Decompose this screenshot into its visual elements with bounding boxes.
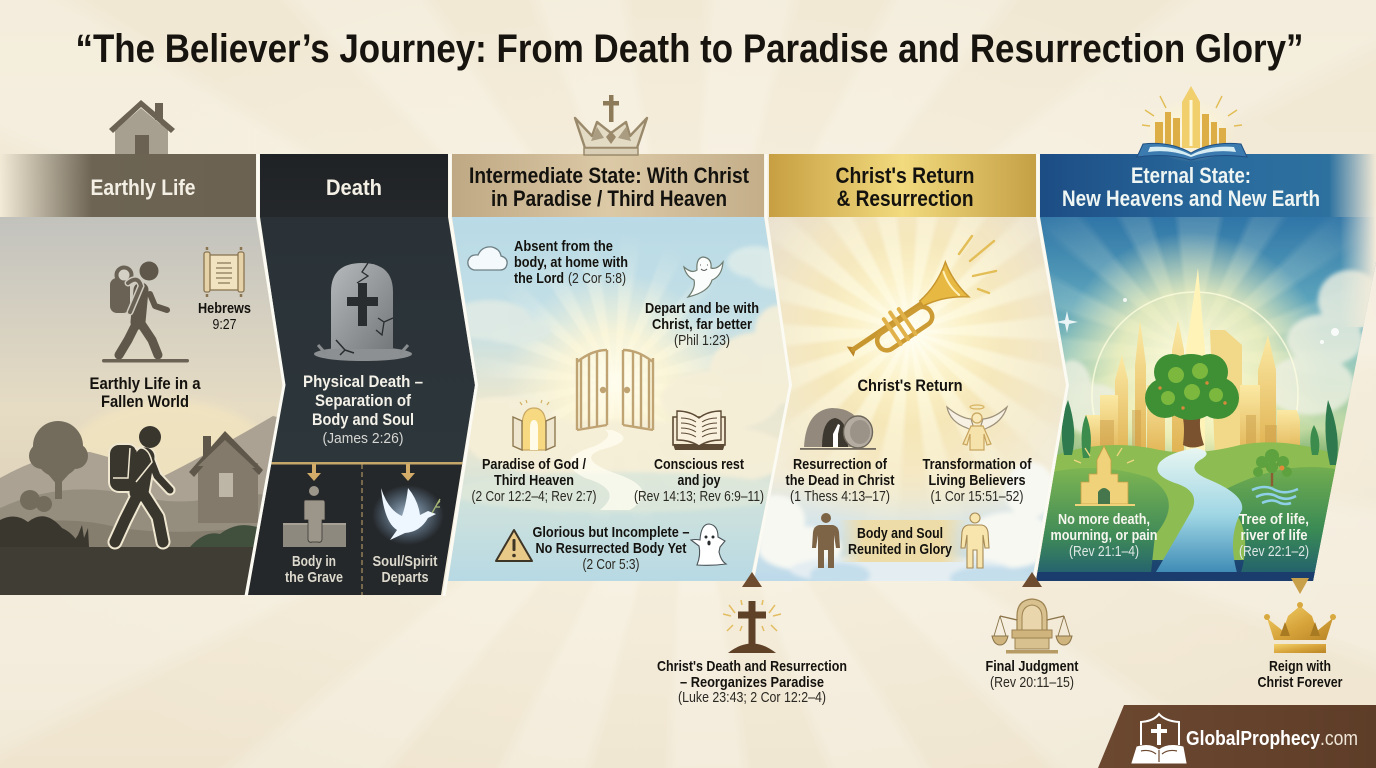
icon: glorified person	[961, 513, 989, 568]
header: death	[260, 154, 448, 217]
text: depart and be with christ: Christ, far better	[652, 316, 752, 333]
icon: house silhouette	[189, 431, 263, 523]
label: (Luke 23:43; 2 Cor 12:2–4)	[678, 690, 826, 706]
label: body in the grave: the Grave	[285, 569, 343, 586]
icon: paradise gate	[513, 400, 555, 454]
tree of life	[1145, 354, 1239, 448]
arrows down	[307, 464, 415, 481]
sparkles	[1056, 298, 1339, 344]
label: physical death: Separation of	[315, 392, 411, 410]
icon: book with golden city	[1137, 86, 1247, 162]
timeline event: reign with christ	[1258, 578, 1343, 691]
icon: body in grave	[283, 486, 346, 547]
body: new heavens and new earth	[1030, 217, 1376, 582]
cypress trees	[1062, 400, 1338, 465]
dome halo	[1091, 291, 1299, 415]
header: christ's return: & Resurrection	[836, 186, 974, 211]
ground and bushes	[0, 516, 257, 595]
body: golden glow and clouds	[745, 217, 1075, 590]
icon: walker top	[102, 262, 189, 362]
text: absent from the body: Absent from the	[514, 238, 613, 255]
text: christ's return: Christ's Return	[858, 377, 962, 395]
text: paradise of god	[472, 456, 596, 505]
panel: eternal state	[1030, 86, 1376, 582]
label: physical death: Physical Death –	[303, 373, 423, 391]
text: depart and be with christ	[645, 300, 759, 349]
label: – Reorganizes Paradise	[680, 674, 824, 691]
text: transformation of living believers: Transformation of	[922, 456, 1032, 473]
text: paradise of god: Paradise of God /	[482, 456, 587, 473]
panel separators	[246, 154, 1068, 596]
header: eternal state: New Heavens and New Earth	[1062, 186, 1320, 211]
text: absent from the body: the Lord	[514, 270, 564, 287]
text: resurrection of the dead	[786, 456, 894, 505]
header: eternal state: Eternal State:	[1131, 163, 1251, 188]
header: intermediate state: Intermediate State: With Christ	[469, 163, 750, 188]
label: Hebrews 9:27: Hebrews	[198, 300, 251, 317]
icon: golden trumpet	[839, 236, 996, 369]
header: death: Death	[326, 175, 382, 200]
text: glorious but incomplete: Glorious but Incomplete –	[532, 524, 690, 541]
label: physical death	[303, 373, 423, 447]
text: conscious rest and joy	[634, 456, 764, 505]
label: Christ's Death and Resurrection	[657, 658, 847, 675]
fade right edge	[1340, 217, 1376, 327]
arrow marker	[1022, 572, 1042, 587]
logo badge	[1098, 705, 1376, 768]
icon: throne and scales	[992, 599, 1072, 654]
panel: earthly life	[0, 100, 290, 597]
label	[657, 658, 847, 706]
text: resurrection of the dead: the Dead in Christ	[786, 472, 894, 489]
icon: empty tomb	[800, 408, 876, 450]
logo text: GlobalProphecy	[1186, 728, 1321, 750]
icon: open book	[673, 411, 725, 450]
text: glorious but incomplete: No Resurrected Body Yet	[536, 540, 687, 557]
label: Christ Forever	[1258, 674, 1343, 691]
logo text: .com	[1320, 728, 1358, 750]
label: Final Judgment	[986, 658, 1078, 675]
body: sky and clouds	[440, 217, 810, 582]
icon: cross with rays	[723, 600, 781, 653]
label: earthly life in a fallen world: Earthly Life in a	[90, 375, 201, 393]
clouds	[1052, 270, 1376, 436]
icon: walker foreground	[109, 426, 170, 542]
text: no more death: mourning, or pain	[1050, 527, 1158, 544]
label	[986, 658, 1078, 691]
icon: golden gates	[577, 350, 653, 430]
panel: christ's return	[745, 154, 1075, 590]
header: intermediate state: in Paradise / Third Heaven	[491, 186, 727, 211]
header: earthly life: Earthly Life	[90, 175, 196, 200]
text: tree of life: river of life	[1240, 527, 1308, 544]
icon: tombstone	[314, 263, 412, 361]
header: christ's return: Christ's Return	[836, 163, 974, 188]
body: death	[240, 217, 480, 598]
icon: tree silhouette	[20, 421, 88, 512]
text: absent from the body: (2 Cor 5:8)	[568, 271, 626, 287]
text: paradise of god: Third Heaven	[494, 472, 574, 489]
text: tree of life: (Rev 22:1–2)	[1239, 544, 1309, 560]
text: depart and be with christ: Depart and be with	[645, 300, 759, 317]
clouds	[759, 461, 1050, 581]
label: Hebrews 9:27	[198, 300, 251, 333]
icon: holy city small	[1074, 446, 1135, 506]
winding path	[570, 430, 643, 510]
icon: ghost	[691, 524, 726, 565]
panel: intermediate state	[440, 95, 810, 582]
label: soul departs	[372, 553, 438, 586]
label: soul departs: Departs	[382, 569, 428, 586]
label: earthly life in a fallen world	[90, 375, 201, 411]
body: earthly life scene	[0, 217, 290, 597]
panel: death	[240, 154, 480, 598]
text: glorious but incomplete: (2 Cor 5:3)	[582, 557, 640, 573]
text: paradise of god: (2 Cor 12:2–4; Rev 2:7)	[472, 489, 596, 505]
header: intermediate state	[452, 154, 764, 217]
label: Reign with	[1269, 658, 1331, 675]
label: body in the grave: Body in	[292, 553, 336, 570]
text: no more death: (Rev 21:1–4)	[1069, 544, 1139, 560]
icon: angel	[947, 405, 1007, 450]
callout: body and soul reunited: Reunited in Glory	[848, 541, 953, 558]
header: eternal state	[1040, 154, 1376, 217]
text: conscious rest and joy: Conscious rest	[654, 456, 744, 473]
text: transformation of living believers: Living Believers	[928, 472, 1026, 489]
icon: brown person	[812, 513, 840, 568]
icon: happy spirit	[684, 257, 723, 297]
arrow marker	[742, 572, 762, 587]
text: conscious rest and joy: (Rev 14:13; Rev 6:9–11)	[634, 489, 764, 505]
icon: gold crown	[1264, 602, 1336, 653]
icon: small cloud	[468, 247, 507, 270]
callout: body and soul reunited: Body and Soul	[857, 525, 943, 542]
text: transformation of living believers: (1 Cor 15:51–52)	[930, 489, 1024, 505]
text: conscious rest and joy: and joy	[678, 472, 721, 489]
arrow marker	[1291, 578, 1309, 594]
clouds	[461, 245, 789, 512]
callout: body and soul reunited	[838, 520, 968, 562]
text: depart and be with christ: (Phil 1:23)	[674, 333, 730, 349]
icon: small tree and water	[1252, 449, 1298, 504]
icon: shield with cross and book	[1132, 714, 1186, 763]
icon: dove	[374, 486, 442, 544]
label: physical death: Body and Soul	[312, 411, 414, 429]
text: tree of life: Tree of life,	[1239, 511, 1309, 528]
label: (Rev 20:11–15)	[990, 675, 1074, 691]
label: physical death: (James 2:26)	[322, 431, 404, 447]
icon: house on header	[109, 100, 175, 154]
label: earthly life in a fallen world: Fallen World	[101, 393, 189, 411]
text: glorious but incomplete	[532, 524, 690, 573]
text: tree of life	[1239, 511, 1309, 560]
text: resurrection of the dead: (1 Thess 4:13–17)	[790, 489, 890, 505]
icon: crown with cross	[575, 95, 647, 155]
timeline event: final judgment	[986, 572, 1078, 691]
header: christ's return	[769, 154, 1036, 217]
text: no more death: No more death,	[1058, 511, 1150, 528]
header: earthly life	[0, 154, 256, 217]
timeline event: christ's death and resurrection	[657, 572, 847, 706]
label: Hebrews 9:27: 9:27	[212, 317, 236, 333]
text: no more death	[1050, 511, 1158, 560]
text: transformation of living believers	[922, 456, 1032, 505]
river	[1156, 448, 1242, 572]
golden city	[1085, 268, 1300, 470]
text: absent from the body	[514, 238, 628, 287]
label: body in the grave	[285, 553, 343, 586]
text: absent from the body: body, at home with	[514, 254, 628, 271]
label: soul departs: Soul/Spirit	[372, 553, 438, 570]
label	[1258, 658, 1343, 691]
icon: warning triangle	[496, 530, 532, 561]
icon: scroll	[204, 247, 244, 297]
text: resurrection of the dead: Resurrection of	[793, 456, 888, 473]
hills	[1040, 442, 1345, 560]
